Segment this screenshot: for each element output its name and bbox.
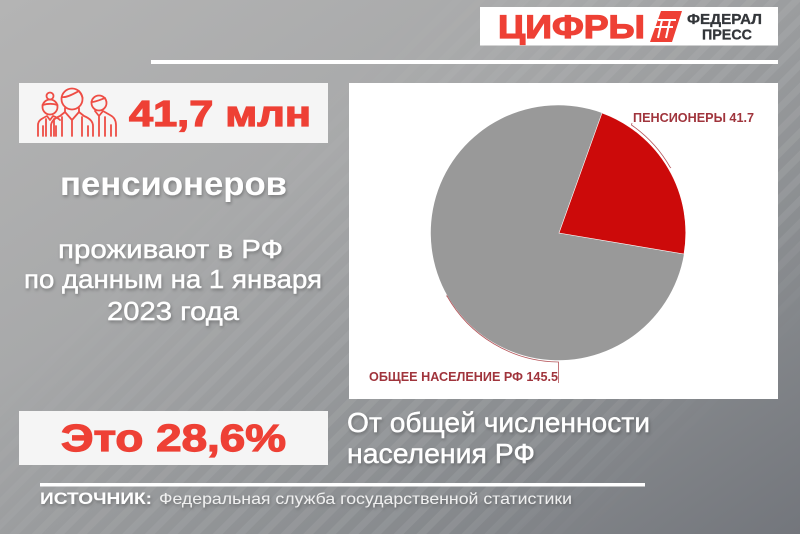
source line (40, 489, 572, 508)
leader line: total population (447, 296, 558, 383)
text block: living in Russia: 2023 года (107, 296, 240, 326)
percentage value: Это 28,6% (61, 418, 286, 460)
text block: share of population: От общей численности (347, 407, 650, 438)
publisher name: ФЕДЕРАЛ (687, 12, 762, 28)
label: total population: ОБЩЕЕ НАСЕЛЕНИЕ РФ 145.5 (369, 369, 558, 384)
text block: living in Russia (24, 234, 322, 326)
text block: share of population (347, 407, 650, 469)
text block: living in Russia: по данным на 1 января (24, 264, 322, 294)
publisher name: ПРЕСС (702, 28, 753, 44)
icon: three people (38, 88, 116, 136)
heading: pensioners: пенсионеров (60, 165, 287, 202)
text block: living in Russia: проживают в РФ (58, 234, 283, 264)
card: percentage (19, 411, 328, 465)
pie slice: total population (431, 105, 684, 360)
icon: publisher logo mark (650, 11, 682, 42)
text block: share of population: населения РФ (347, 438, 535, 469)
top divider (151, 60, 778, 64)
banner title: ЦИФРЫ (498, 9, 645, 45)
label: pensioners: ПЕНСИОНЕРЫ 41.7 (633, 110, 754, 125)
publisher name (687, 12, 762, 44)
bottom divider (40, 483, 645, 486)
card: pensioner count (19, 83, 328, 143)
pie slice: pensioners (559, 113, 686, 254)
logo banner (480, 7, 778, 46)
big number: 41,7 млн (129, 93, 311, 134)
source line: Федеральная служба государственной статистики (159, 491, 572, 508)
leader line: pensioners (632, 123, 671, 168)
panel: pie chart (349, 83, 778, 399)
source line: ИСТОЧНИК: (40, 489, 152, 508)
